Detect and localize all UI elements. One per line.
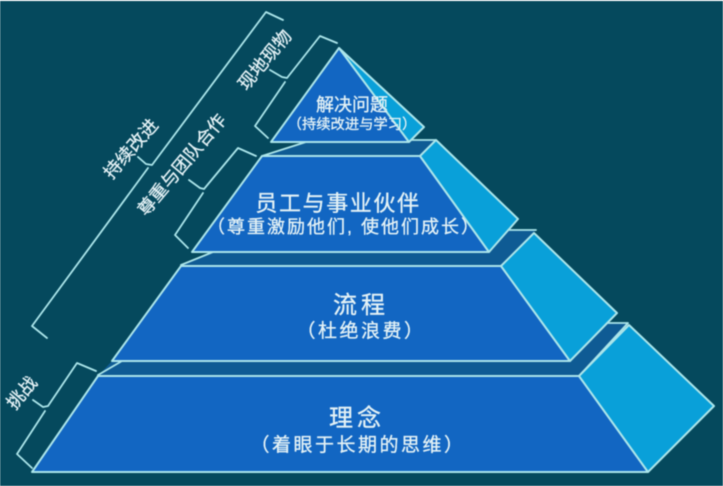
tier 2: employees and partners: 员工与事业伙伴 <box>255 191 421 216</box>
bracket: go and see: 现地现物 <box>234 26 296 94</box>
tier 4: philosophy <box>32 325 714 472</box>
tier 3: process: （杜绝浪费） <box>296 320 426 342</box>
tier 1 connector <box>262 140 436 156</box>
bracket: respect and teamwork <box>134 110 256 248</box>
tier 1: problem solving: 解决问题 <box>316 95 388 115</box>
tier 4: philosophy: 理念 <box>329 405 385 432</box>
tier 2 connector <box>181 230 536 266</box>
tier 3 connector <box>98 323 628 376</box>
tier 4: philosophy: （着眼于长期的思维） <box>250 434 466 456</box>
bracket: respect and teamwork: 尊重与团队合作 <box>134 110 230 220</box>
bracket: continuous improvement: 持续改进 <box>100 115 162 183</box>
bracket: go and see <box>234 26 337 138</box>
bracket: continuous improvement <box>32 12 283 338</box>
bracket: challenge: 挑战 <box>3 373 41 413</box>
tier 1: problem solving: （持续改进与学习） <box>288 116 416 133</box>
tier 2: employees and partners: （尊重激励他们, 使他们成长） <box>207 217 481 237</box>
bracket: challenge <box>3 363 96 468</box>
tier 1: problem solving <box>271 48 424 142</box>
tier 2: employees and partners <box>192 140 518 252</box>
tier 3: process: 流程 <box>333 292 389 319</box>
tier 3: process <box>112 233 617 361</box>
